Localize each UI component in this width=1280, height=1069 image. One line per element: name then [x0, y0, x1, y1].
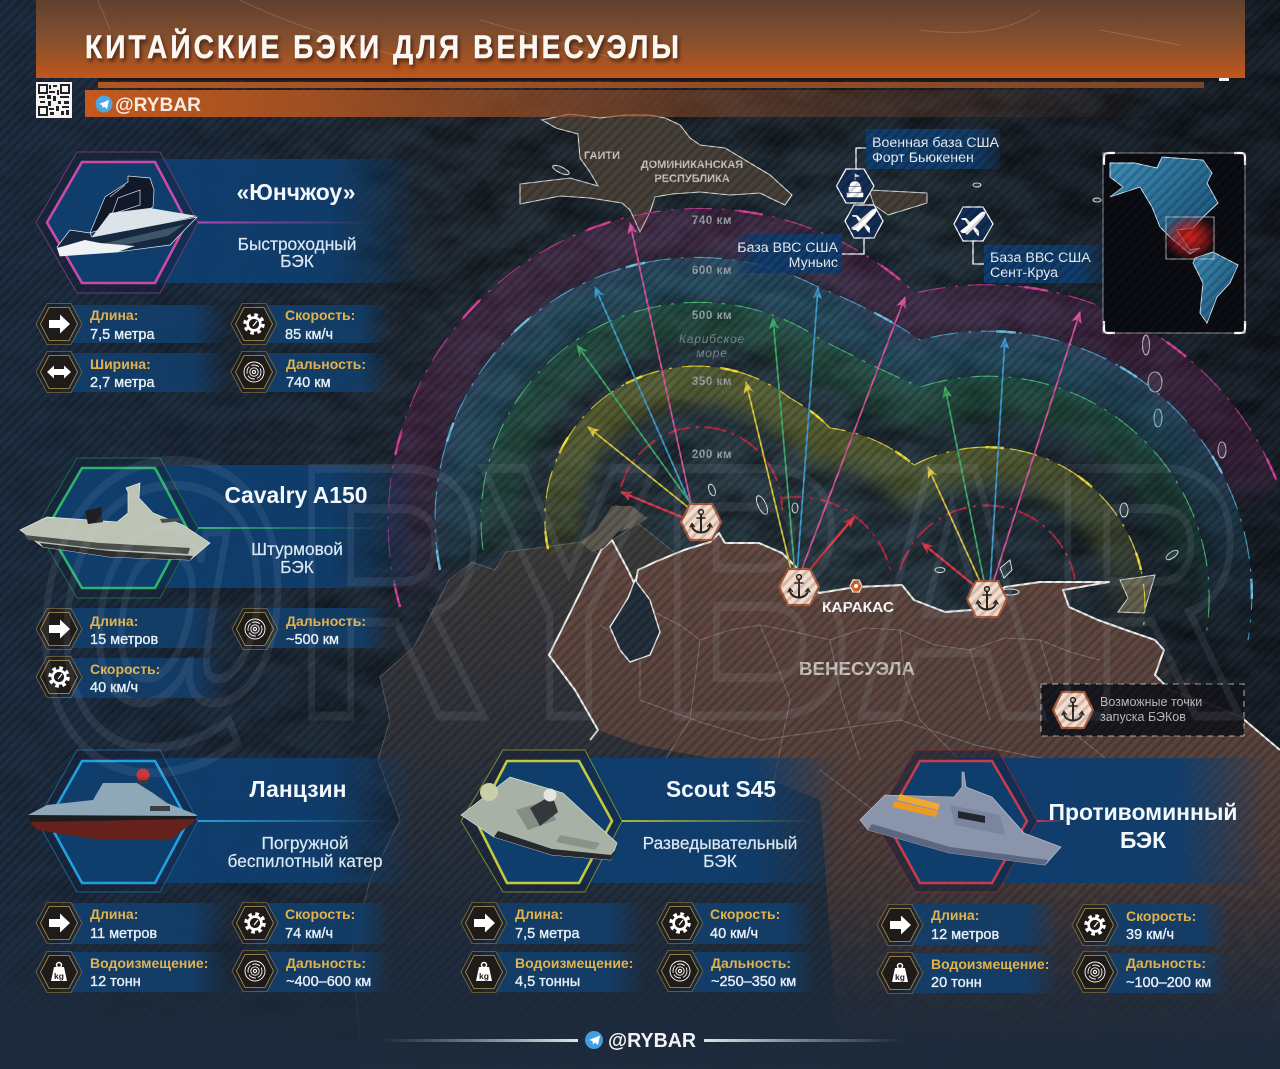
description: БЭК — [280, 251, 314, 271]
range band: 350 km — [545, 366, 1145, 630]
stat: длина: 7,5 метра — [90, 327, 155, 343]
panel: Scout S45 — [461, 750, 840, 892]
header banner — [36, 0, 1245, 78]
inset: North America — [1110, 157, 1218, 254]
range band: 740 km — [388, 209, 1278, 607]
icon: plane Muniz — [845, 205, 883, 238]
handle ribbon — [85, 90, 1160, 117]
callout: Muniz: Муньис — [789, 255, 838, 271]
heading: Противоминный — [1048, 799, 1238, 825]
stat: дальность: Дальность: — [1126, 955, 1206, 971]
icon: anchor launch point C — [967, 581, 1007, 617]
stat: длина: Длина: — [90, 307, 138, 323]
bottom vignette — [0, 870, 1280, 1069]
boat: Ланцзин — [28, 768, 197, 840]
range band: 200 km — [621, 427, 1075, 580]
heading: Cavalry A150 — [224, 482, 368, 508]
range band: 600 km — [435, 257, 1252, 640]
arrows from launch point A — [577, 223, 694, 518]
stat: длина: 15 метров — [90, 632, 158, 648]
stat: скорость — [1072, 904, 1230, 946]
stat: скорость: Скорость: — [1126, 908, 1196, 924]
description: БЭК — [280, 557, 314, 577]
panel: Юнчжоу — [36, 152, 420, 293]
stat: дальность — [657, 950, 815, 992]
stat: скорость: Скорость: — [710, 906, 780, 922]
stat: дальность: ~100–200 км — [1126, 975, 1211, 991]
heading: Scout S45 — [666, 776, 776, 802]
range band: 500 km — [481, 302, 1209, 640]
stat: водоизмещение — [461, 952, 644, 992]
stat: скорость — [231, 304, 390, 344]
callout: Muniz — [737, 234, 864, 273]
stat: скорость: 74 км/ч — [285, 926, 333, 942]
stat: водоизмещение: Водоизмещение: — [931, 956, 1049, 972]
range labels: 200 км — [692, 449, 732, 461]
footer text: @RYBAR — [608, 1030, 697, 1052]
map: Hispaniola — [520, 114, 792, 232]
description: беспилотный катер — [228, 851, 382, 871]
stat: скорость: 85 км/ч — [285, 327, 333, 343]
inset map: Americas — [1103, 153, 1245, 333]
icon: anchor launch point A — [681, 504, 721, 540]
stat: водоизмещение: 4,5 тонны — [515, 974, 580, 990]
stat: скорость — [657, 902, 815, 944]
header rules — [98, 78, 1245, 88]
map: Lake Maracaibo — [610, 580, 660, 662]
stat: скорость: 39 км/ч — [1126, 927, 1174, 943]
stat: длина: 7,5 метра — [515, 926, 580, 942]
stat: водоизмещение: 12 тонн — [90, 974, 141, 990]
description: Штурмовой — [251, 539, 343, 559]
label: Caracas: КАРАКАС — [822, 600, 895, 616]
legend: text: запуска БЭКов — [1100, 710, 1186, 724]
label: Caribbean Sea: море — [696, 346, 728, 360]
inset: highlighted region frame — [1166, 217, 1214, 259]
label: Dominican Republic: ДОМИНИКАНСКАЯ — [641, 159, 743, 171]
panel: Противоминный БЭК — [860, 750, 1268, 892]
stat: ширина: 2,7 метра — [90, 375, 155, 391]
map: islands — [552, 163, 1226, 595]
icon: plane Saint Croix — [954, 207, 993, 241]
stat: ширина — [36, 352, 228, 392]
boat: Юнчжоу — [57, 176, 197, 256]
label: Haiti: ГАИТИ — [584, 150, 620, 162]
inset: South America — [1193, 252, 1238, 323]
description: Погружной — [262, 833, 348, 853]
callout: Muniz: База ВВС США — [737, 240, 839, 256]
stat: длина — [36, 304, 228, 344]
description: Быстроходный — [238, 234, 356, 254]
stat: скорость: Скорость: — [285, 906, 355, 922]
stat: скорость: 40 км/ч — [710, 926, 758, 942]
stat: водоизмещение: Водоизмещение: — [90, 955, 208, 971]
stat: ширина: Ширина: — [90, 356, 151, 372]
range labels — [692, 215, 732, 461]
stat: водоизмещение: 20 тонн — [931, 975, 982, 991]
legend: text: Возможные точки — [1100, 695, 1202, 709]
stat: дальность: ~250–350 км — [711, 974, 796, 990]
stat: дальность — [232, 608, 390, 650]
boat: Cavalry A150 — [20, 483, 210, 560]
callout: Fort Buchanan: Форт Бьюкенен — [872, 150, 974, 166]
stat: длина: 11 метров — [90, 926, 157, 942]
stat: длина: Длина: — [90, 906, 138, 922]
range labels: 350 км — [692, 376, 732, 388]
legend — [1041, 684, 1244, 736]
icon: telegram — [585, 1031, 603, 1049]
stat: водоизмещение: kg — [479, 971, 489, 981]
label: Dominican Republic: РЕСПУБЛИКА — [654, 173, 730, 185]
heading line 2: БЭК — [1120, 827, 1167, 853]
handle text: @RYBAR — [115, 95, 201, 116]
footer handle — [380, 1030, 904, 1052]
stat: скорость: Скорость: — [285, 307, 355, 323]
stat: дальность: ~400–600 км — [286, 974, 371, 990]
legend: anchor icon — [1053, 692, 1093, 728]
stat: дальность: Дальность: — [286, 955, 366, 971]
heading: Ланцзин — [250, 776, 346, 802]
map: coastline of Venezuela — [549, 533, 1280, 750]
stat: скорость: Скорость: — [90, 661, 160, 677]
title: КИТАЙСКИЕ БЭКИ ДЛЯ ВЕНЕСУЭЛЫ — [85, 29, 679, 65]
stat: дальность — [232, 950, 390, 992]
description: БЭК — [703, 851, 737, 871]
range labels: 740 км — [692, 215, 732, 227]
label: Venezuela: ВЕНЕСУЭЛА — [799, 659, 915, 679]
icon: military base — [836, 169, 874, 203]
callout: Saint Croix: Сент-Круа — [990, 265, 1058, 281]
map: Puerto Rico — [869, 190, 927, 215]
stat: длина: Длина: — [515, 906, 563, 922]
range labels: 600 км — [692, 265, 732, 277]
stat: дальность: ~500 км — [286, 632, 339, 648]
stat: длина — [461, 902, 644, 944]
heading: «Юнчжоу» — [236, 179, 356, 205]
stat: дальность — [231, 352, 390, 392]
map: Trinidad — [1118, 575, 1155, 613]
stat: длина — [36, 608, 228, 650]
stat: дальность: Дальность: — [286, 613, 366, 629]
QR code — [36, 82, 72, 118]
map: Venezuela and eastern land — [549, 533, 1280, 1069]
stat: скорость — [36, 656, 228, 698]
stat: длина — [877, 904, 1060, 946]
label: Caribbean Sea: Карибское — [679, 332, 745, 346]
stat: дальность: Дальность: — [711, 955, 791, 971]
stat: скорость: 40 км/ч — [90, 680, 138, 696]
stat: водоизмещение: kg — [54, 971, 64, 981]
inset: frame corners — [1104, 153, 1245, 333]
arrows from launch point B — [746, 288, 905, 574]
callout: Saint Croix — [973, 241, 1104, 283]
stat: длина: 12 метров — [931, 927, 999, 943]
stat: скорость — [232, 902, 390, 944]
icon: telegram — [96, 96, 112, 112]
stat: водоизмещение: Водоизмещение: — [515, 955, 633, 971]
stat: длина: Длина: — [90, 613, 138, 629]
icon: anchor launch point B — [779, 569, 819, 605]
callout: Fort Buchanan — [856, 129, 1000, 172]
stat: длина — [36, 902, 228, 944]
arrows from launch point C — [922, 312, 1080, 586]
stat: длина: Длина: — [931, 907, 979, 923]
stat: дальность: 740 км — [286, 375, 331, 391]
boat: Противоминный — [860, 772, 1061, 865]
stat: водоизмещение: kg — [895, 972, 905, 982]
map: Guajira peninsula — [581, 506, 647, 552]
description: Разведывательный — [643, 833, 797, 853]
marker: Caracas — [850, 580, 862, 592]
stat: дальность — [1072, 952, 1230, 993]
boat: Scout S45 — [461, 777, 617, 860]
range labels: 500 км — [692, 310, 732, 322]
stat: дальность: Дальность: — [286, 356, 366, 372]
stat: водоизмещение — [877, 952, 1060, 994]
inset: highlighted region glow — [1162, 213, 1218, 261]
callout: Saint Croix: База ВВС США — [990, 250, 1091, 266]
stat: водоизмещение — [36, 952, 228, 992]
panel: Cavalry A150 — [20, 458, 420, 598]
map: Colombia and western land — [352, 505, 860, 1068]
callout: Fort Buchanan: Военная база США — [872, 135, 1000, 151]
panel: Ланцзин — [28, 750, 415, 892]
